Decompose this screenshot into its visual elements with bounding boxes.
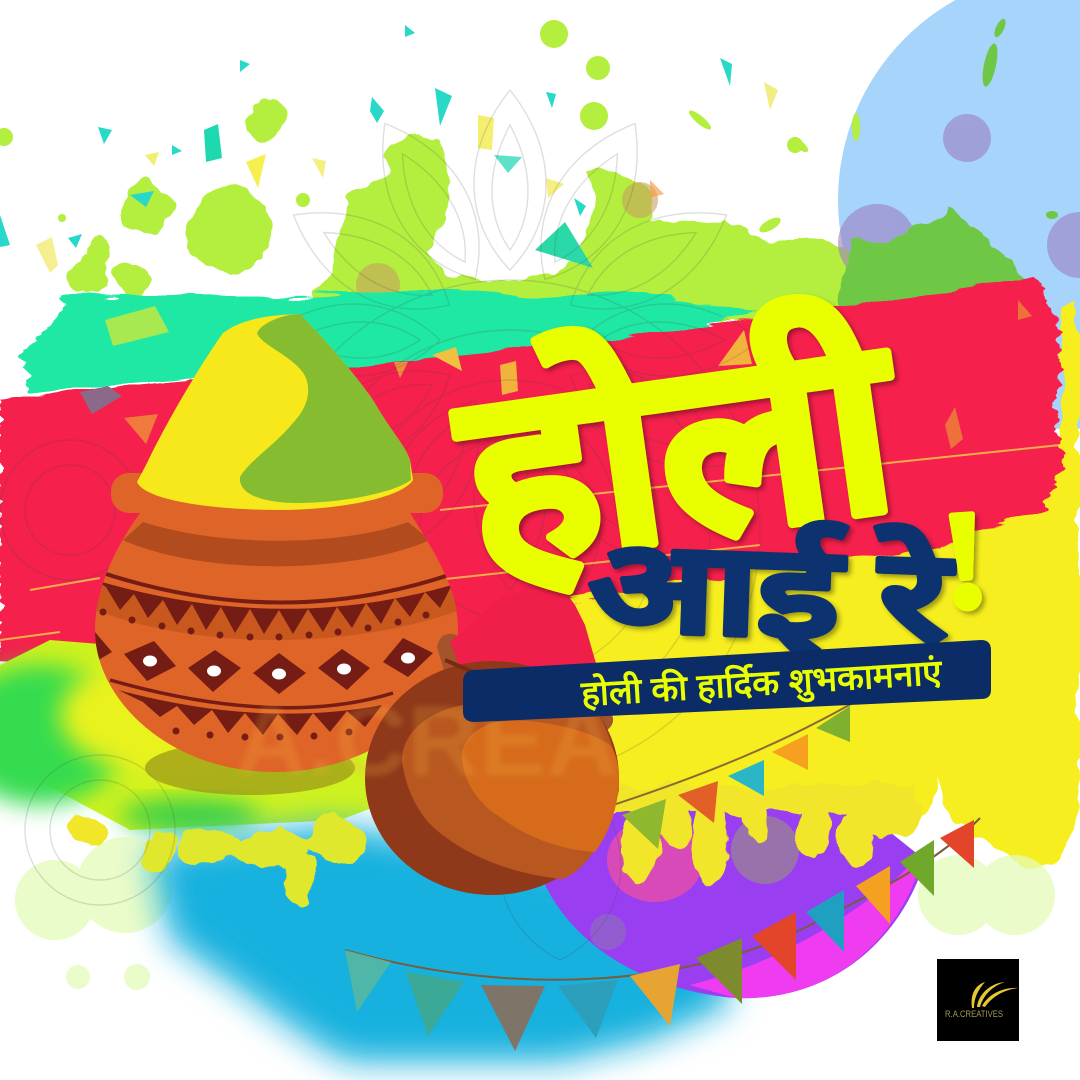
teal brush stroke bbox=[22, 292, 760, 392]
diamonds bbox=[124, 638, 433, 694]
upper bunting bbox=[610, 690, 875, 849]
pot rim bbox=[111, 473, 443, 513]
pot decoration bbox=[95, 522, 460, 740]
red powder bbox=[450, 574, 605, 690]
pink and mauve splotches bbox=[590, 816, 799, 950]
powder green bbox=[240, 314, 411, 503]
yellow lines on red bbox=[0, 445, 1060, 640]
powder yellow bbox=[137, 314, 413, 510]
title text bbox=[443, 286, 994, 668]
banner shape bbox=[463, 640, 991, 722]
faint watermark text: A.CREA bbox=[235, 685, 618, 797]
blue paint bottom bbox=[150, 825, 730, 1062]
banner text: होली की हार्दिक शुभकामनाएं bbox=[579, 652, 944, 716]
pale green circles bbox=[15, 837, 1055, 990]
small pot rim bbox=[437, 634, 613, 735]
logo swoosh bbox=[972, 982, 1018, 1008]
muted purple circles bbox=[356, 114, 1080, 307]
logo text: R.A.CREATIVES bbox=[945, 1009, 1003, 1019]
lower bunting bbox=[345, 818, 980, 1051]
confetti bbox=[0, 25, 778, 273]
pot shadow bbox=[145, 741, 355, 795]
logo square bbox=[937, 959, 1019, 1041]
pot body bbox=[95, 505, 458, 772]
green splash under blue circle bbox=[840, 205, 1030, 310]
yellow paint right bbox=[420, 300, 1080, 868]
red brush stroke bbox=[0, 276, 1064, 660]
green streaks on blue circle bbox=[980, 17, 1058, 219]
small pot middle lobe bbox=[402, 690, 619, 879]
mandala outline overlay bbox=[0, 90, 760, 960]
small pot with red powder bbox=[365, 574, 619, 895]
green and yellow paint left bbox=[0, 640, 500, 831]
small pot rim band bbox=[445, 660, 480, 675]
yellow paint drips bbox=[70, 785, 918, 908]
logo bbox=[937, 959, 1019, 1041]
purple circle bbox=[535, 800, 925, 998]
small pot inner lobe bbox=[462, 721, 619, 852]
exclamation mark: ! bbox=[936, 481, 994, 639]
title: aayi re: आई रे bbox=[587, 514, 956, 668]
lime droplets bbox=[0, 20, 860, 235]
magenta crescent bbox=[690, 850, 925, 998]
confetti on red and teal bbox=[80, 300, 1032, 449]
light blue circle bbox=[838, 0, 1080, 429]
large pot with powder bbox=[95, 314, 460, 795]
small pot body bbox=[365, 661, 619, 895]
subtitle banner bbox=[463, 640, 991, 722]
lime splash background bbox=[70, 99, 1000, 330]
title: holi: होली bbox=[443, 286, 916, 616]
